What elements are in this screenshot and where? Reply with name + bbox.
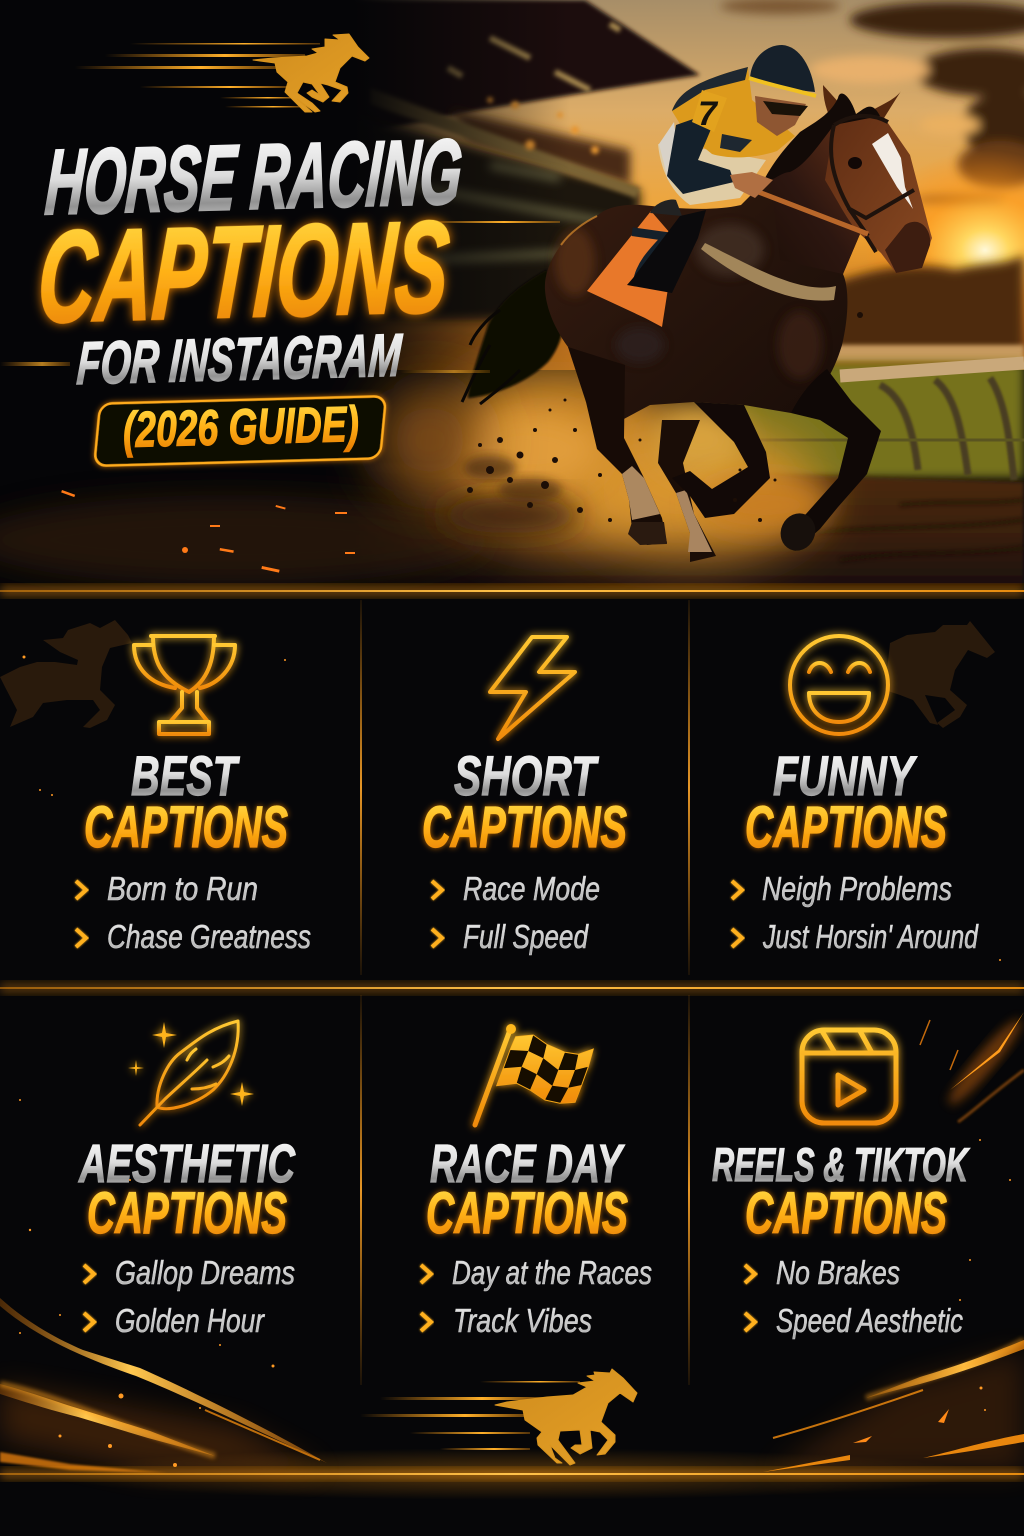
helmet (750, 45, 815, 92)
heading: funny: FUNNY (773, 744, 917, 807)
speed lines (360, 1381, 580, 1450)
horse silhouette (253, 34, 369, 112)
heading: aesthetic: AESTHETIC (78, 1134, 296, 1194)
ghost: horse right (885, 621, 995, 728)
speed lines (75, 43, 320, 108)
heading: captions: CAPTIONS (422, 795, 627, 860)
dust clouds (375, 360, 830, 555)
white seat panel (659, 122, 675, 180)
list: aesthetic captions: Gallop Dreams (115, 1254, 295, 1291)
rim light along back (561, 216, 597, 245)
eye (848, 157, 862, 169)
panel: best captions (76, 636, 311, 955)
list: short captions (432, 870, 600, 955)
top horse logo with speed lines (75, 34, 369, 112)
list: race day captions: Track Vibes (453, 1302, 592, 1339)
dark fade over the left of the hero (0, 0, 570, 590)
muscle highlights (555, 224, 822, 379)
neck highlight (792, 128, 860, 274)
title line: HORSE RACING: HORSE RACING (43, 120, 465, 234)
list: best captions: Chase Greatness (107, 918, 311, 955)
jockey face (755, 96, 806, 136)
icon: feather with sparkles (128, 1021, 254, 1125)
white rail and posts (760, 363, 1024, 480)
racehorse body (545, 182, 860, 419)
jersey number plate (692, 90, 727, 133)
left flare (0, 1298, 327, 1473)
footer flare rays (0, 656, 1024, 1500)
extended front leg (782, 369, 881, 551)
horse silhouette (495, 1369, 637, 1465)
title (34, 120, 465, 466)
track furrows (800, 500, 1024, 560)
far track band (830, 345, 1024, 362)
hero photo: jockey and racehorse at sunset (0, 0, 1024, 590)
jockey sleeve (667, 118, 734, 194)
jersey number plate: 7 (698, 95, 719, 133)
panel: funny captions (732, 636, 979, 955)
ears (823, 85, 900, 118)
jockey jersey (672, 67, 795, 157)
pale stocking on near hind leg (622, 466, 660, 520)
list: reels captions (745, 1254, 963, 1339)
embers on the track (61, 490, 355, 573)
horse tail (462, 270, 564, 404)
list: aesthetic captions: Golden Hour (115, 1302, 266, 1339)
near hind leg (568, 347, 667, 545)
dirt track (391, 474, 1024, 589)
heading: captions: CAPTIONS (87, 1181, 287, 1246)
bottom centre glow (42, 1448, 982, 1500)
saddle (650, 200, 682, 216)
panel: aesthetic captions (78, 1021, 296, 1339)
panel: reels and tiktok captions (712, 1030, 970, 1339)
ghost horse silhouettes behind top row (0, 620, 995, 728)
panel: race day captions (421, 1024, 652, 1339)
icon: trophy (134, 636, 235, 734)
rider breeches (658, 144, 766, 205)
footer divider (0, 1469, 1024, 1479)
sunset sky (330, 0, 1024, 370)
list: funny captions: Neigh Problems (762, 870, 952, 907)
list: reels captions: Speed Aesthetic (776, 1302, 963, 1339)
far hind leg (658, 420, 716, 562)
grid divider lines (0, 600, 1024, 1385)
heading: short: SHORT (454, 744, 599, 807)
white blaze (872, 133, 913, 209)
mane (765, 93, 880, 180)
jockey hand (730, 172, 773, 198)
faint dirt tone left (0, 495, 490, 585)
infield grass (700, 362, 1024, 478)
icon: lightning bolt (490, 637, 575, 739)
sun (917, 154, 1024, 326)
list: short captions: Full Speed (463, 918, 589, 955)
front hoof (780, 513, 815, 551)
list: best captions: Born to Run (107, 870, 258, 907)
top right burst (920, 1012, 1024, 1122)
hoof near hind (628, 522, 667, 545)
heading: captions: CAPTIONS (84, 795, 288, 860)
right flare (763, 1340, 1024, 1472)
icon: laughing face (790, 636, 888, 734)
nostril and muzzle shading (885, 222, 930, 273)
heading: best: BEST (131, 744, 240, 807)
rein (756, 191, 868, 234)
list: race day captions: Day at the Races (452, 1254, 652, 1291)
hero bottom divider (0, 586, 1024, 596)
sunset clouds (720, 0, 1024, 205)
year badge (93, 395, 388, 466)
list: aesthetic captions (84, 1254, 295, 1339)
list: race day captions (421, 1254, 652, 1339)
grandstand (330, 0, 700, 320)
horse head (825, 114, 932, 273)
list: funny captions (732, 870, 979, 955)
list: reels captions: No Brakes (776, 1254, 900, 1291)
year badge: (2026 GUIDE) (122, 396, 360, 458)
helmet stripe (749, 78, 816, 96)
bent front leg (672, 402, 770, 518)
title line: CAPTIONS: CAPTIONS (34, 193, 453, 350)
list: best captions (76, 870, 311, 955)
icon: checkered flag (475, 1024, 593, 1125)
goggles (763, 101, 808, 116)
riding boot (627, 210, 706, 293)
bridle (831, 116, 914, 252)
heading: race day: RACE DAY (430, 1134, 625, 1194)
breast girth (701, 243, 836, 301)
motion light streaks (0, 221, 560, 373)
panel: short captions (422, 637, 627, 955)
black jersey panels (672, 67, 752, 152)
heading: captions: CAPTIONS (426, 1181, 628, 1246)
dirt particles (467, 312, 863, 522)
sparks (19, 656, 1011, 1467)
title line: FOR INSTAGRAM: FOR INSTAGRAM (75, 321, 404, 397)
list: short captions: Race Mode (463, 870, 600, 907)
pale stocking on far hind leg (676, 490, 712, 552)
bottom horse logo with speed lines (360, 1369, 637, 1465)
saddle cloth with number 7: 7 (620, 210, 675, 303)
icon: reels clapper (802, 1030, 896, 1123)
saddle cloth with number 7 (587, 210, 676, 327)
distant dark treeline (830, 255, 1024, 352)
ghost: jockey and horse left (0, 620, 132, 728)
